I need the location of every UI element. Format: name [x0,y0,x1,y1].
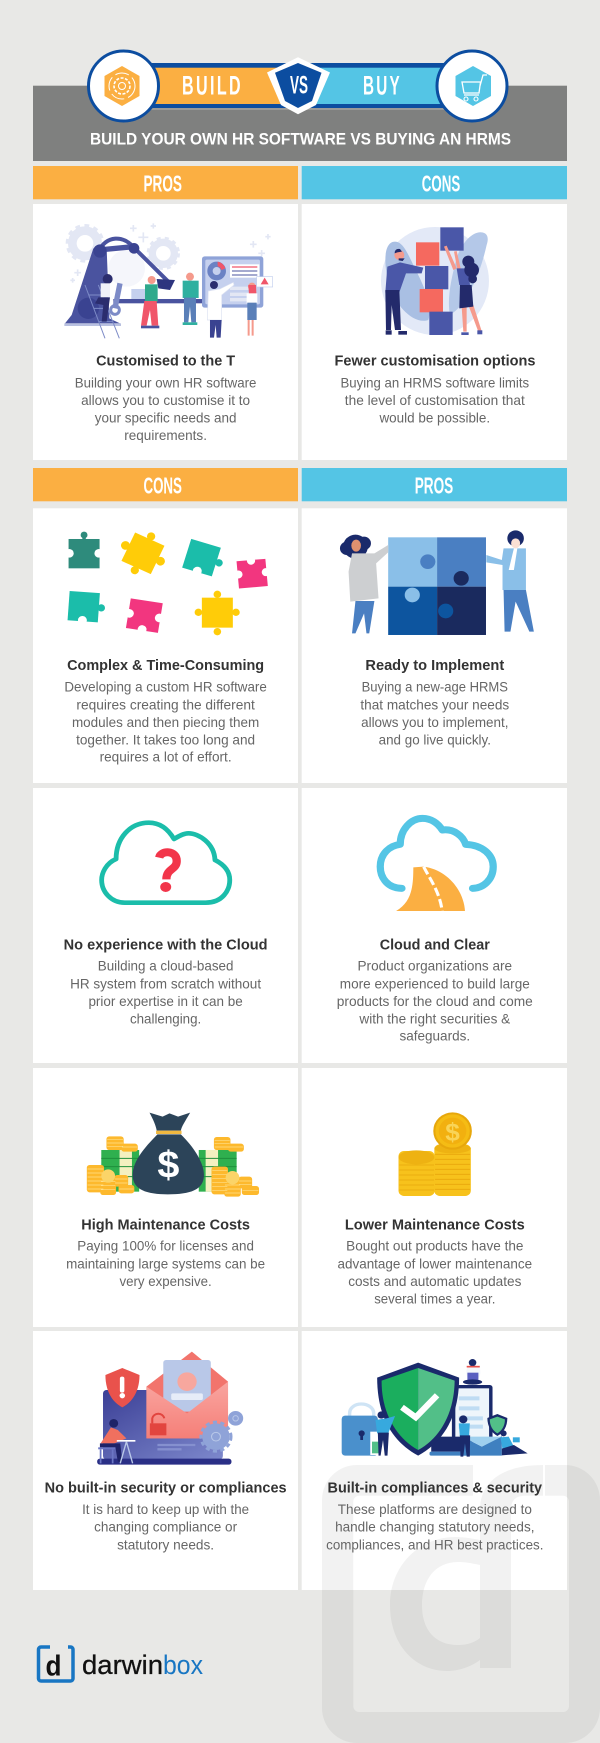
bar: pros (buy): PROS [415,473,453,499]
text: cloud and clear: Product organizations are [358,959,512,974]
heading: fewer options: Fewer customisation options [334,354,536,370]
logo: darwinbox: box [163,1650,203,1680]
text: complex: modules and then piecing them [72,715,259,730]
text: lower costs: costs and automatic updates [348,1274,522,1289]
text: ready: that matches your needs [360,697,509,712]
text: fewer options: would be possible. [378,411,490,426]
bar: cons (build): CONS [143,473,182,499]
bar: pros (build): PROS [143,171,182,197]
text: complex: together. It takes too long and [76,732,255,747]
heading: lower costs: Lower Maintenance Costs [345,1217,525,1233]
text: fewer options: Buying an HRMS software limits [340,375,529,390]
text: fewer options [340,375,529,426]
text: built-in compliance: compliances, and HR best practices. [326,1537,543,1552]
badge: vs shield: VS [290,71,308,99]
bar: cons (buy): CONS [422,171,460,197]
text: customised: your specific needs and [95,411,236,426]
heading: no cloud experience: No experience with the Cloud [64,937,268,953]
text: complex: requires a lot of effort. [100,750,232,765]
watermark logo [322,1465,600,1743]
text: no cloud experience: HR system from scratch without [70,976,261,991]
badge: vs shield [267,57,330,114]
text: complex [64,680,267,765]
text: complex: Developing a custom HR software [64,680,267,695]
text: no security: changing compliance or [94,1520,238,1535]
text: high costs: very expensive. [119,1274,212,1289]
banner: build [153,68,288,104]
heading: cloud and clear: Cloud and Clear [380,937,490,953]
logo: darwinbox [38,1647,203,1682]
text: lower costs: advantage of lower maintenance [338,1256,532,1271]
text: no cloud experience: challenging. [130,1011,201,1026]
build vs buy banner [88,51,507,121]
illustration: team assembling jigsaw [340,530,534,635]
banner: buy: BUY [363,70,402,100]
text: cloud and clear: safeguards. [400,1029,470,1044]
text: high costs: Paying 100% for licenses and [77,1239,254,1254]
text: no security: statutory needs. [117,1537,214,1552]
text: cloud and clear: with the right securities & [358,1011,510,1026]
text: customised: Building your own HR software [75,375,256,390]
illustration: stacked gold coins [399,1113,471,1196]
text: lower costs: Bought out products have the [346,1239,523,1254]
text: ready: and go live quickly. [379,732,491,747]
icon: cloud with question mark [102,823,230,903]
heading: customised: Customised to the T [96,354,235,370]
illustration: compliance shield and team [342,1359,528,1457]
text: cloud and clear [337,959,533,1044]
heading: no security: No built-in security or compliances [45,1481,287,1497]
icon: buy cart badge [437,51,507,121]
text: high costs [66,1239,265,1289]
text: lower costs: several times a year. [374,1291,495,1306]
title: BUILD YOUR OWN HR SOFTWARE VS BUYING AN HRMS [90,130,511,148]
text: complex: requires creating the different [76,697,255,712]
text: built-in compliance [326,1502,543,1552]
banner: buy [308,68,441,104]
card backgrounds [33,204,567,1590]
illustration: money bag with coins [87,1113,259,1197]
text: customised [75,375,256,443]
heading: ready: Ready to Implement [365,658,504,674]
text: no cloud experience [70,959,261,1026]
heading: complex: Complex & Time-Consuming [67,658,264,674]
illustration: security breach laptop [97,1352,243,1465]
text: ready [360,680,509,747]
logo: darwinbox: d [46,1650,62,1682]
heading: high costs: High Maintenance Costs [81,1217,250,1233]
text: no security: It is hard to keep up with the [82,1502,249,1517]
banner: build: BUILD [182,70,243,100]
heading: built-in compliance: Built-in compliances & security [328,1481,542,1497]
text: lower costs [338,1239,532,1306]
illustration: scattered puzzle pieces [65,523,271,637]
text: built-in compliance: These platforms are designed to [338,1502,532,1517]
header band [33,86,567,161]
bar: pros (build) [33,166,298,199]
text: customised: allows you to customise it to [81,393,250,408]
text: cloud and clear: products for the cloud and come [337,994,533,1009]
text: fewer options: the level of customisation that [345,393,525,408]
logo: darwinbox: darwin [82,1650,163,1680]
illustration: stacking blocks [381,227,489,335]
text: no cloud experience: Building a cloud-based [98,959,233,974]
text: high costs: maintaining large systems can be [66,1256,265,1271]
illustration: stacked gold coins: $ [445,1119,460,1146]
text: cloud and clear: more experienced to build large [340,976,530,991]
text: no cloud experience: prior expertise in it can be [88,994,243,1009]
bar: cons (build) [33,468,298,501]
illustration: factory team customising [64,223,273,338]
icon: cloud with road [380,818,493,912]
text: built-in compliance: handle changing statutory needs, [335,1520,534,1535]
bar: cons (buy) [302,166,567,199]
illustration: money bag with coins: $ [157,1144,180,1187]
text: ready: Buying a new-age HRMS [362,680,508,695]
text: no security [82,1502,249,1552]
bar: pros (buy) [302,468,567,501]
icon: build gear badge [88,51,158,121]
text: customised: requirements. [124,428,207,443]
text: ready: allows you to implement, [361,715,508,730]
